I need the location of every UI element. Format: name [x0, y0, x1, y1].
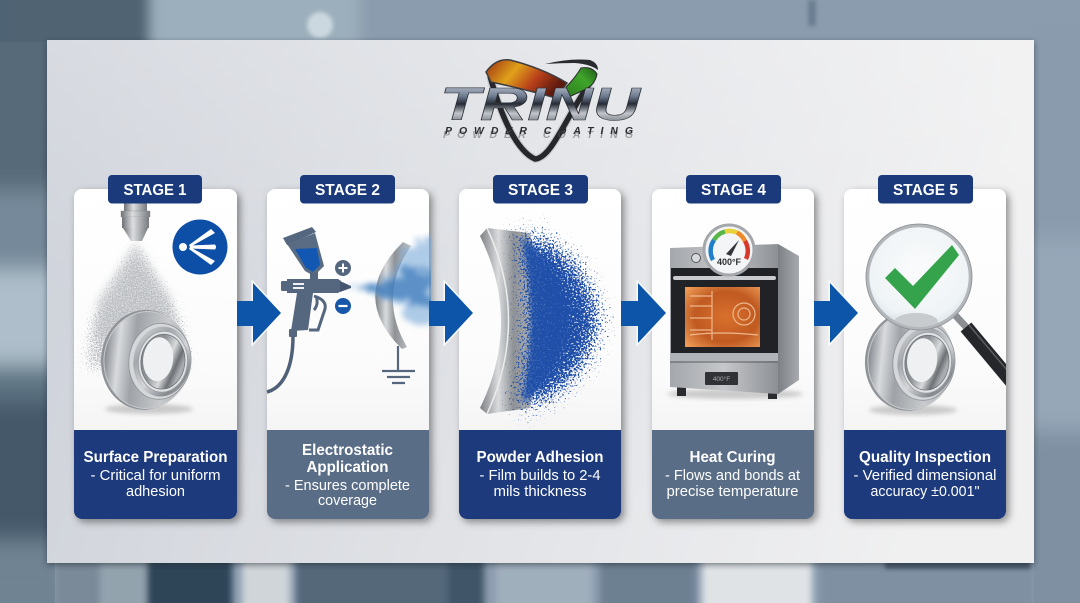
caption text [665, 449, 801, 500]
caption text: coverage [318, 492, 377, 509]
minus charge [335, 298, 351, 314]
ring [860, 306, 960, 415]
card: stage 2 [267, 175, 445, 519]
caption text: Electrostatic [302, 442, 393, 459]
caption text: adhesion [126, 483, 185, 500]
tab: stage 1 [108, 175, 202, 204]
magnifier handle [955, 315, 1012, 382]
caption text: - Film builds to 2-4 [480, 467, 600, 484]
green check mark [885, 245, 959, 309]
oven display [705, 372, 738, 385]
grounded part [375, 242, 415, 383]
nozzle [121, 203, 150, 241]
tab: stage 2 [300, 175, 395, 204]
powder cloud [352, 236, 445, 322]
caption text [285, 442, 410, 509]
arrow: stage 3 to 4 [621, 283, 666, 343]
tab: stage 5 [878, 175, 973, 204]
caption text: Application [306, 459, 388, 476]
arrow: stage 2 to 3 [429, 283, 473, 343]
illustration: inspection magnifier [860, 224, 1012, 415]
caption text: accuracy ±0.001" [870, 483, 980, 500]
logo: TriNu Powder Coating [440, 60, 643, 159]
hose [267, 336, 293, 392]
card: stage 3 [459, 175, 621, 519]
tab: stage 3: STAGE 3 [508, 182, 573, 199]
illustration: curing oven [667, 225, 803, 399]
illustration: electrostatic spray gun [267, 227, 445, 392]
caption text: Quality Inspection [859, 449, 991, 466]
arrow: stage 4 to 5 [814, 283, 858, 343]
tab: stage 2: STAGE 2 [315, 182, 380, 199]
card: stage 1 [74, 175, 237, 519]
caption text: - Flows and bonds at [665, 467, 801, 484]
temperature gauge: 400°F [717, 257, 742, 267]
caption text [476, 449, 604, 500]
caption panel [652, 430, 814, 519]
logo wordmark: TRINU [440, 78, 643, 130]
illustration: powder adhering to curved part [480, 224, 602, 416]
caption panel [459, 430, 621, 519]
caption text [854, 449, 996, 500]
illustration: spray nozzle and ring [82, 203, 228, 414]
spray mist [82, 240, 194, 372]
caption text: - Verified dimensional [854, 467, 996, 484]
ring [96, 305, 196, 414]
curved metal part [480, 228, 541, 414]
caption panel [74, 430, 237, 519]
tab: stage 4: STAGE 4 [701, 182, 766, 199]
tab: stage 3 [493, 175, 588, 204]
arrow: stage 1 to 2 [237, 283, 281, 343]
tab: stage 1: STAGE 1 [124, 182, 187, 199]
caption panel [844, 430, 1006, 519]
spray gun [281, 227, 351, 337]
logo tagline reflection: POWDER COATING [443, 129, 633, 141]
powder particles [512, 224, 602, 416]
magnifier lens [866, 224, 972, 331]
tab: stage 5: STAGE 5 [893, 182, 958, 199]
oven [667, 244, 803, 399]
main panel [47, 40, 1034, 563]
caption panel [267, 430, 429, 519]
caption text: Surface Preparation [84, 449, 228, 466]
tab: stage 4 [686, 175, 781, 204]
card: stage 5 [844, 175, 1012, 519]
icon: spray circle [172, 220, 228, 274]
caption text: Heat Curing [690, 449, 776, 466]
caption text: precise temperature [666, 483, 798, 500]
powder core [522, 238, 570, 402]
caption text: - Critical for uniform [90, 467, 220, 484]
plus charge [335, 260, 351, 276]
logo tagline: POWDER COATING [445, 125, 633, 137]
caption text [84, 449, 228, 500]
caption text: mils thickness [494, 483, 586, 500]
card: stage 4 [652, 175, 814, 519]
caption text: Powder Adhesion [476, 449, 604, 466]
caption text: - Ensures complete [285, 477, 410, 494]
temperature gauge [704, 225, 754, 275]
logo emblem [486, 60, 598, 159]
oven display: 400°F [713, 375, 730, 383]
